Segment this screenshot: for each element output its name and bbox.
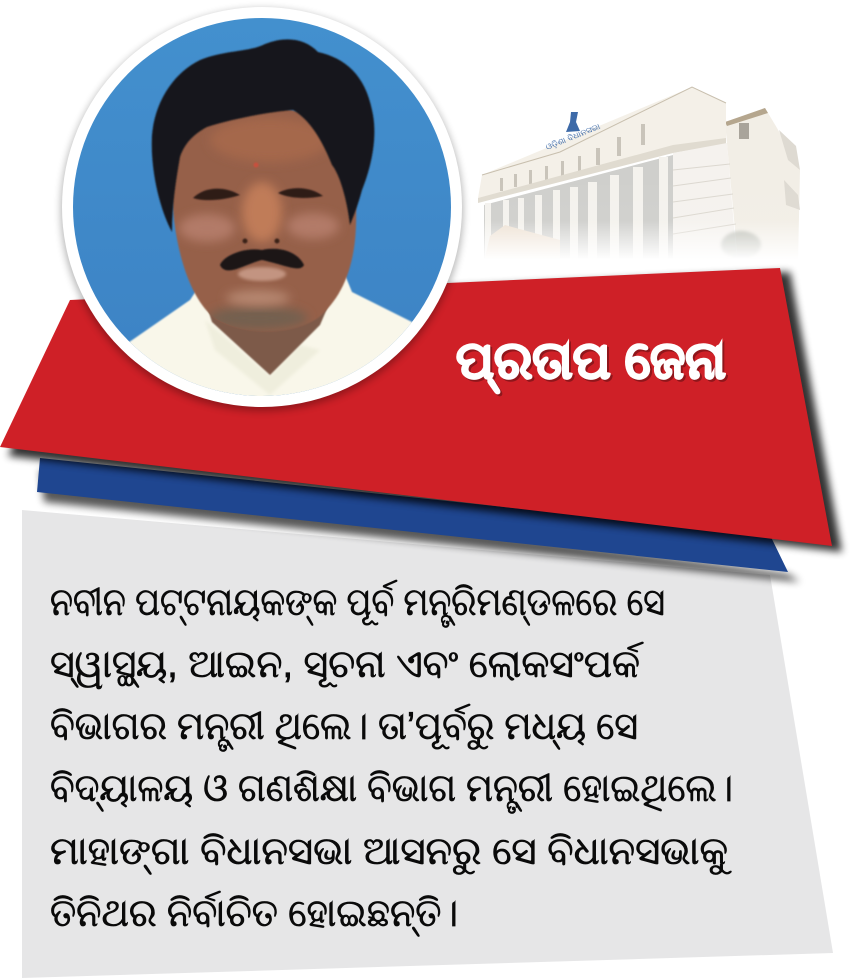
title: name: ପ୍ରତାପ ଜେନା [458,334,728,395]
text block: biography: ବିଭାଗର ମନ୍ତ୍ରୀ ଥିଲେ। ତା’ପୂର୍ବରୁ ମଧ୍ୟ ସେ [50,703,638,752]
text block: biography: ମାହାଙ୍ଗା ବିଧାନସଭା ଆସନରୁ ସେ ବିଧାନସଭାକୁ [50,830,732,876]
sign: assembly name: ଓଡ଼ିଶା ବିଧାନସଭା [544,122,602,152]
text block: biography: ବିଦ୍ୟାଳୟ ଓ ଗଣଶିକ୍ଷା ବିଭାଗ ମନ୍ତ୍ରୀ ହୋଇଥିଲେ। [50,767,733,814]
nose [242,182,282,242]
fade to white [465,175,810,267]
corner block [673,143,737,262]
text block: biography: ନବୀନ ପଟ୍ଟନାୟକଙ୍କ ପୂର୍ବ ମନ୍ତ୍ରିମଣ୍ଡଳରେ ସେ [50,579,665,628]
side wing [725,108,800,262]
text block: biography: ତିନିଥର ନିର୍ବାଚିତ ହୋଇଛନ୍ତି। [50,890,458,937]
lips [238,267,286,281]
tilak [254,162,258,168]
moustache [220,249,304,270]
icon: building lattice window [739,123,749,139]
entrance canopy [484,225,560,262]
facade glass [484,155,673,262]
forehead shading [212,119,324,161]
shirt [129,276,412,396]
face [172,108,356,331]
columns [485,157,668,262]
parapet [478,87,726,198]
nostrils [242,238,248,244]
illustration: assembly building [465,87,810,267]
neck [208,307,328,376]
chin stubble [208,306,308,330]
eyes [193,189,240,200]
hair [152,39,374,232]
palm tree [721,231,761,259]
cheeks [179,214,235,242]
portrait photo [61,7,463,420]
panel: grey text background [22,510,833,978]
panel: red banner [0,268,842,552]
icon: state emblem [566,112,580,132]
panel: blue ribbon [37,458,800,582]
text block: biography [50,579,733,937]
parapet slots [500,124,645,191]
title: name: ପ୍ରତାପ ଜେନା [456,332,726,393]
text block: biography: ସ୍ୱାସ୍ଥ୍ୟ, ଆଇନ, ସୂଚନା ଏବଂ ଲୋକସଂପର୍କ [50,641,644,689]
